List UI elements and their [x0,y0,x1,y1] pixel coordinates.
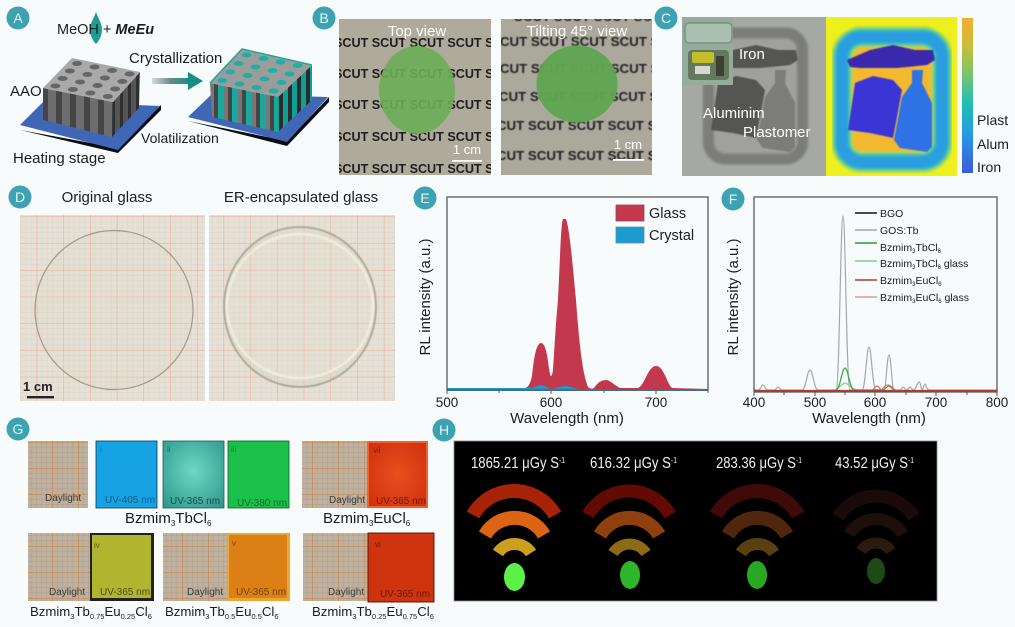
y axis title: RL intensity (a.u.) [725,238,742,356]
caption: Tb0.5: Tb [209,604,225,619]
scale bar [613,137,644,161]
photo: tilted view: SCUT SCUT SCUT SCUT SCUT [491,34,687,49]
photo: Eu daylight: Daylight [329,495,365,506]
caption: Tb0.5: 0.5 [225,612,235,621]
caption: Tb0.25: 0.75 [403,612,417,621]
tick labels: 500 [804,395,826,410]
photo: Tb0.75 UV: iv [94,541,100,550]
badge F [722,188,744,210]
dose rate 616.32: 616.32 μGy S [590,455,685,472]
filled template [210,49,312,132]
tick labels: 600 [864,395,886,410]
photo: tilted view [501,19,652,175]
legend: Bzmim [880,242,912,254]
legend: 3 [912,282,916,288]
badge G: G [13,421,23,437]
photo: Eu UV: UV-365 nm [376,496,426,507]
AAO template [43,58,140,137]
caption: Tb0.5: 0.5 [251,612,262,621]
photo: tilted view: SCUT SCUT SCUT SCUT SCUT [488,118,684,133]
caption: Tb0.5: Eu [235,604,251,619]
caption: Tb0.5: 6 [274,612,279,621]
panel E: RL spectra chart [414,186,708,427]
legend: EuCl [915,292,938,304]
scale bar: 1 cm [23,379,53,394]
caption: Tb0.5: 3 [205,612,209,621]
crystal spectrum [447,385,708,391]
tick labels: 800 [986,395,1008,410]
legend: glass [941,258,968,270]
photo: UV 365: ii [167,445,171,454]
glass spectrum [447,219,708,391]
photo inset [682,17,733,85]
legend: Glass [649,206,686,222]
Eu spectra [872,385,895,390]
badge H: H [439,422,449,438]
photo: tilted view: SCUT SCUT SCUT SCUT [514,9,670,24]
dose rate 283.36: 283.36 μGy S [716,455,811,472]
dose rate 43.52: 43.52 μGy S [835,455,921,472]
panel A: crystallization schematic [6,6,329,167]
icon: precursor drop [90,12,102,44]
tick labels: 400 [743,395,765,410]
panel G: sample photographs [6,418,434,621]
photo: top view: SCUT SCUT SCUT SCUT SCUT [334,36,520,50]
caption: Tb0.25: Cl [417,604,430,619]
panel H: dose rate imaging [432,418,937,601]
tick labels: 700 [925,395,947,410]
caption: EuCl: 3 [369,519,374,528]
caption: Tb0.25: 0.25 [372,612,386,621]
photo: UV 365 [163,441,224,508]
caption: EuCl: EuCl [373,510,406,527]
photo: Tb0.75 daylight: Daylight [49,587,85,598]
photo: top view: SCUT SCUT SCUT SCUT SCUT [334,162,520,176]
photo: UV 380: UV-380 nm [237,498,287,509]
heating stage right [188,94,329,146]
legend: TbCl [915,242,938,254]
label: heating stage: Heating stage [13,150,106,167]
photo: Tb daylight: Daylight [45,493,81,504]
photo: Tb daylight [28,441,88,508]
photo: Tb0.25 UV: UV-365 nm [380,589,430,600]
caption: EuCl: Bzmim [323,510,369,527]
legend: TbCl [915,258,938,270]
wifi icon 4 [838,496,914,584]
photo: UV 405: i [100,445,102,454]
wifi icon 1 [473,491,555,591]
photo: Eu UV: vii [373,446,381,455]
photo: top view: SCUT SCUT SCUT SCUT SCUT [334,98,520,112]
caption: Tb0.5: Bzmim [165,604,205,619]
scale bar: 1 cm [614,137,642,152]
photo: UV 380 [228,441,289,509]
wifi icon 2 [588,491,670,589]
photo: Tb0.25 UV: vi [375,540,381,549]
label: plastomer: Plastomer [743,124,811,141]
label: plast: Plast [977,112,1008,128]
photo: Tb0.25 daylight: Daylight [328,587,364,598]
badge F: F [729,191,737,207]
legend: 6 [938,299,942,305]
caption: Tb0.75: Tb [74,604,90,619]
caption: Tb0.25: Tb [356,604,372,619]
color bar [962,18,973,173]
caption: Tb0.75: 0.25 [121,612,135,621]
legend [855,208,969,305]
caption: TbCl: TbCl [175,510,207,527]
photo: tilted view: SCUT SCUT SCUT SCUT SCUT [490,89,686,104]
legend: 6 [938,249,942,255]
caption: Tb0.75: Eu [104,604,121,619]
photo: top view [339,19,491,175]
photo: UV 405: UV-405 nm [105,495,155,506]
dose rate 616.32: -1 [671,456,677,465]
photo: Tb0.25 UV [368,533,434,602]
badge C [654,6,678,30]
heading: original glass: Original glass [62,189,152,206]
caption: Tb0.75: 6 [148,612,152,621]
photo: Eu daylight [302,441,367,508]
photo: UV 405 [96,441,157,508]
badge E [414,186,436,210]
dose rate 283.36: -1 [796,456,802,465]
caption: Tb0.25: Eu [386,604,403,619]
caption: top view: Top view [388,23,446,40]
photo: Tb0.75 daylight [28,533,90,601]
y axis title: RL intensity (a.u.) [417,238,434,356]
photo: Tb0.75 UV [90,533,154,601]
photo: top view: SCUT SCUT SCUT SCUT SCUT [334,67,520,81]
label: crystallization: Crystallization [129,50,222,67]
tick labels [436,395,667,410]
caption: Tb0.25: 6 [430,612,434,621]
legend: 3 [912,249,916,255]
panel D: glass photographs [8,186,395,401]
photo: Tb0.5 daylight: Daylight [187,587,223,598]
badge D [8,186,32,208]
label: volatilization: Volatilization [141,130,219,146]
photo: encapsulated glass [209,215,395,401]
legend: EuCl [915,275,938,287]
photo: Eu UV [367,441,428,508]
caption: Tb0.5: Cl [262,604,274,619]
caption: tilted view: Tilting 45° view [527,23,627,40]
photo: UV 365: UV-365 nm [170,496,220,507]
dose rate 1865.21: 1865.21 μGy S [471,455,575,472]
label: alum: Alum [977,136,1009,152]
black image panel [454,441,937,601]
legend: Crystal [649,228,694,244]
photo: tilted view: SCUT SCUT SCUT SCUT SCUT [491,61,687,76]
label: iron: Iron [739,46,765,63]
photo: Tb0.5 UV: UV-365 nm [236,587,286,598]
badge B: B [319,10,329,26]
panel F: comparison spectra chart [722,188,1008,427]
caption: TbCl: 6 [207,519,212,528]
photo: Tb0.5 UV: v [232,539,236,548]
badge B [312,6,336,30]
caption: Tb0.75: 3 [70,612,74,621]
wifi icon 3 [716,491,798,589]
X-ray image [682,17,826,176]
caption: Tb0.25: Bzmim [312,604,352,619]
photo: Tb0.25 daylight [303,533,368,601]
caption: Tb0.75: Bzmim [30,604,70,619]
tick labels: 500 [436,395,458,410]
legend: GOS:Tb [880,225,919,237]
panel C: X-ray imaging [654,6,1009,176]
badge A: A [13,10,23,26]
legend [616,205,694,244]
photo: original glass [20,215,205,401]
Tb glass spectrum [834,383,858,390]
label: precursor solution: MeOH + MeEu [57,22,154,38]
caption: EuCl: 6 [406,519,411,528]
legend: Bzmim [880,258,912,270]
legend: Bzmim [880,292,912,304]
legend: 3 [912,299,916,305]
tick labels [743,395,1008,410]
badge D: D [15,189,25,205]
baseline [754,390,997,392]
heating stage left [20,101,161,153]
x axis title: Wavelength (nm) [812,410,926,427]
GOS:Tb spectrum [754,216,997,390]
legend: 6 [938,282,942,288]
caption: TbCl: 3 [171,519,176,528]
axes [754,197,997,396]
arrow: crystallization [152,72,203,90]
photo: Tb0.5 daylight [163,533,227,601]
caption: Tb0.75: 0.75 [90,612,104,621]
photo: top view: SCUT SCUT SCUT SCUT SCUT [334,130,520,144]
colormap image [826,17,957,176]
legend: 6 [938,265,942,271]
legend: BGO [880,208,903,220]
caption: Tb0.75: Cl [135,604,148,619]
dose rate 1865.21: -1 [559,456,565,465]
Tb crystal spectrum [836,368,895,390]
heading: encapsulated glass: ER-encapsulated glass [224,189,378,206]
legend: glass [942,292,969,304]
badge E: E [420,190,430,206]
caption: TbCl: Bzmim [125,510,171,527]
caption: Tb0.25: 3 [352,612,356,621]
label: iron: Iron [977,159,1001,175]
badge C: C [661,10,671,26]
scale bar: 1 cm [453,142,481,157]
axes [447,197,708,394]
label: AAO: AAO [10,83,42,100]
x axis title: Wavelength (nm) [510,410,624,427]
dose rate 43.52: -1 [908,456,914,465]
tick labels: 600 [540,395,562,410]
photo: Tb0.75 UV: UV-365 nm [100,587,150,598]
panel B: photographs of film [312,6,687,176]
legend: Bzmim [880,275,912,287]
label: aluminium: Aluminim [703,105,765,122]
badge H [432,418,456,442]
badge A [6,6,30,30]
photo: Tb0.5 UV [227,533,290,601]
photo: tilted view: SCUT SCUT SCUT SCUT SCUT [488,148,684,163]
legend: 3 [912,265,916,271]
tick labels: 700 [645,395,667,410]
badge G [6,418,30,440]
photo: UV 380: iii [231,445,237,454]
